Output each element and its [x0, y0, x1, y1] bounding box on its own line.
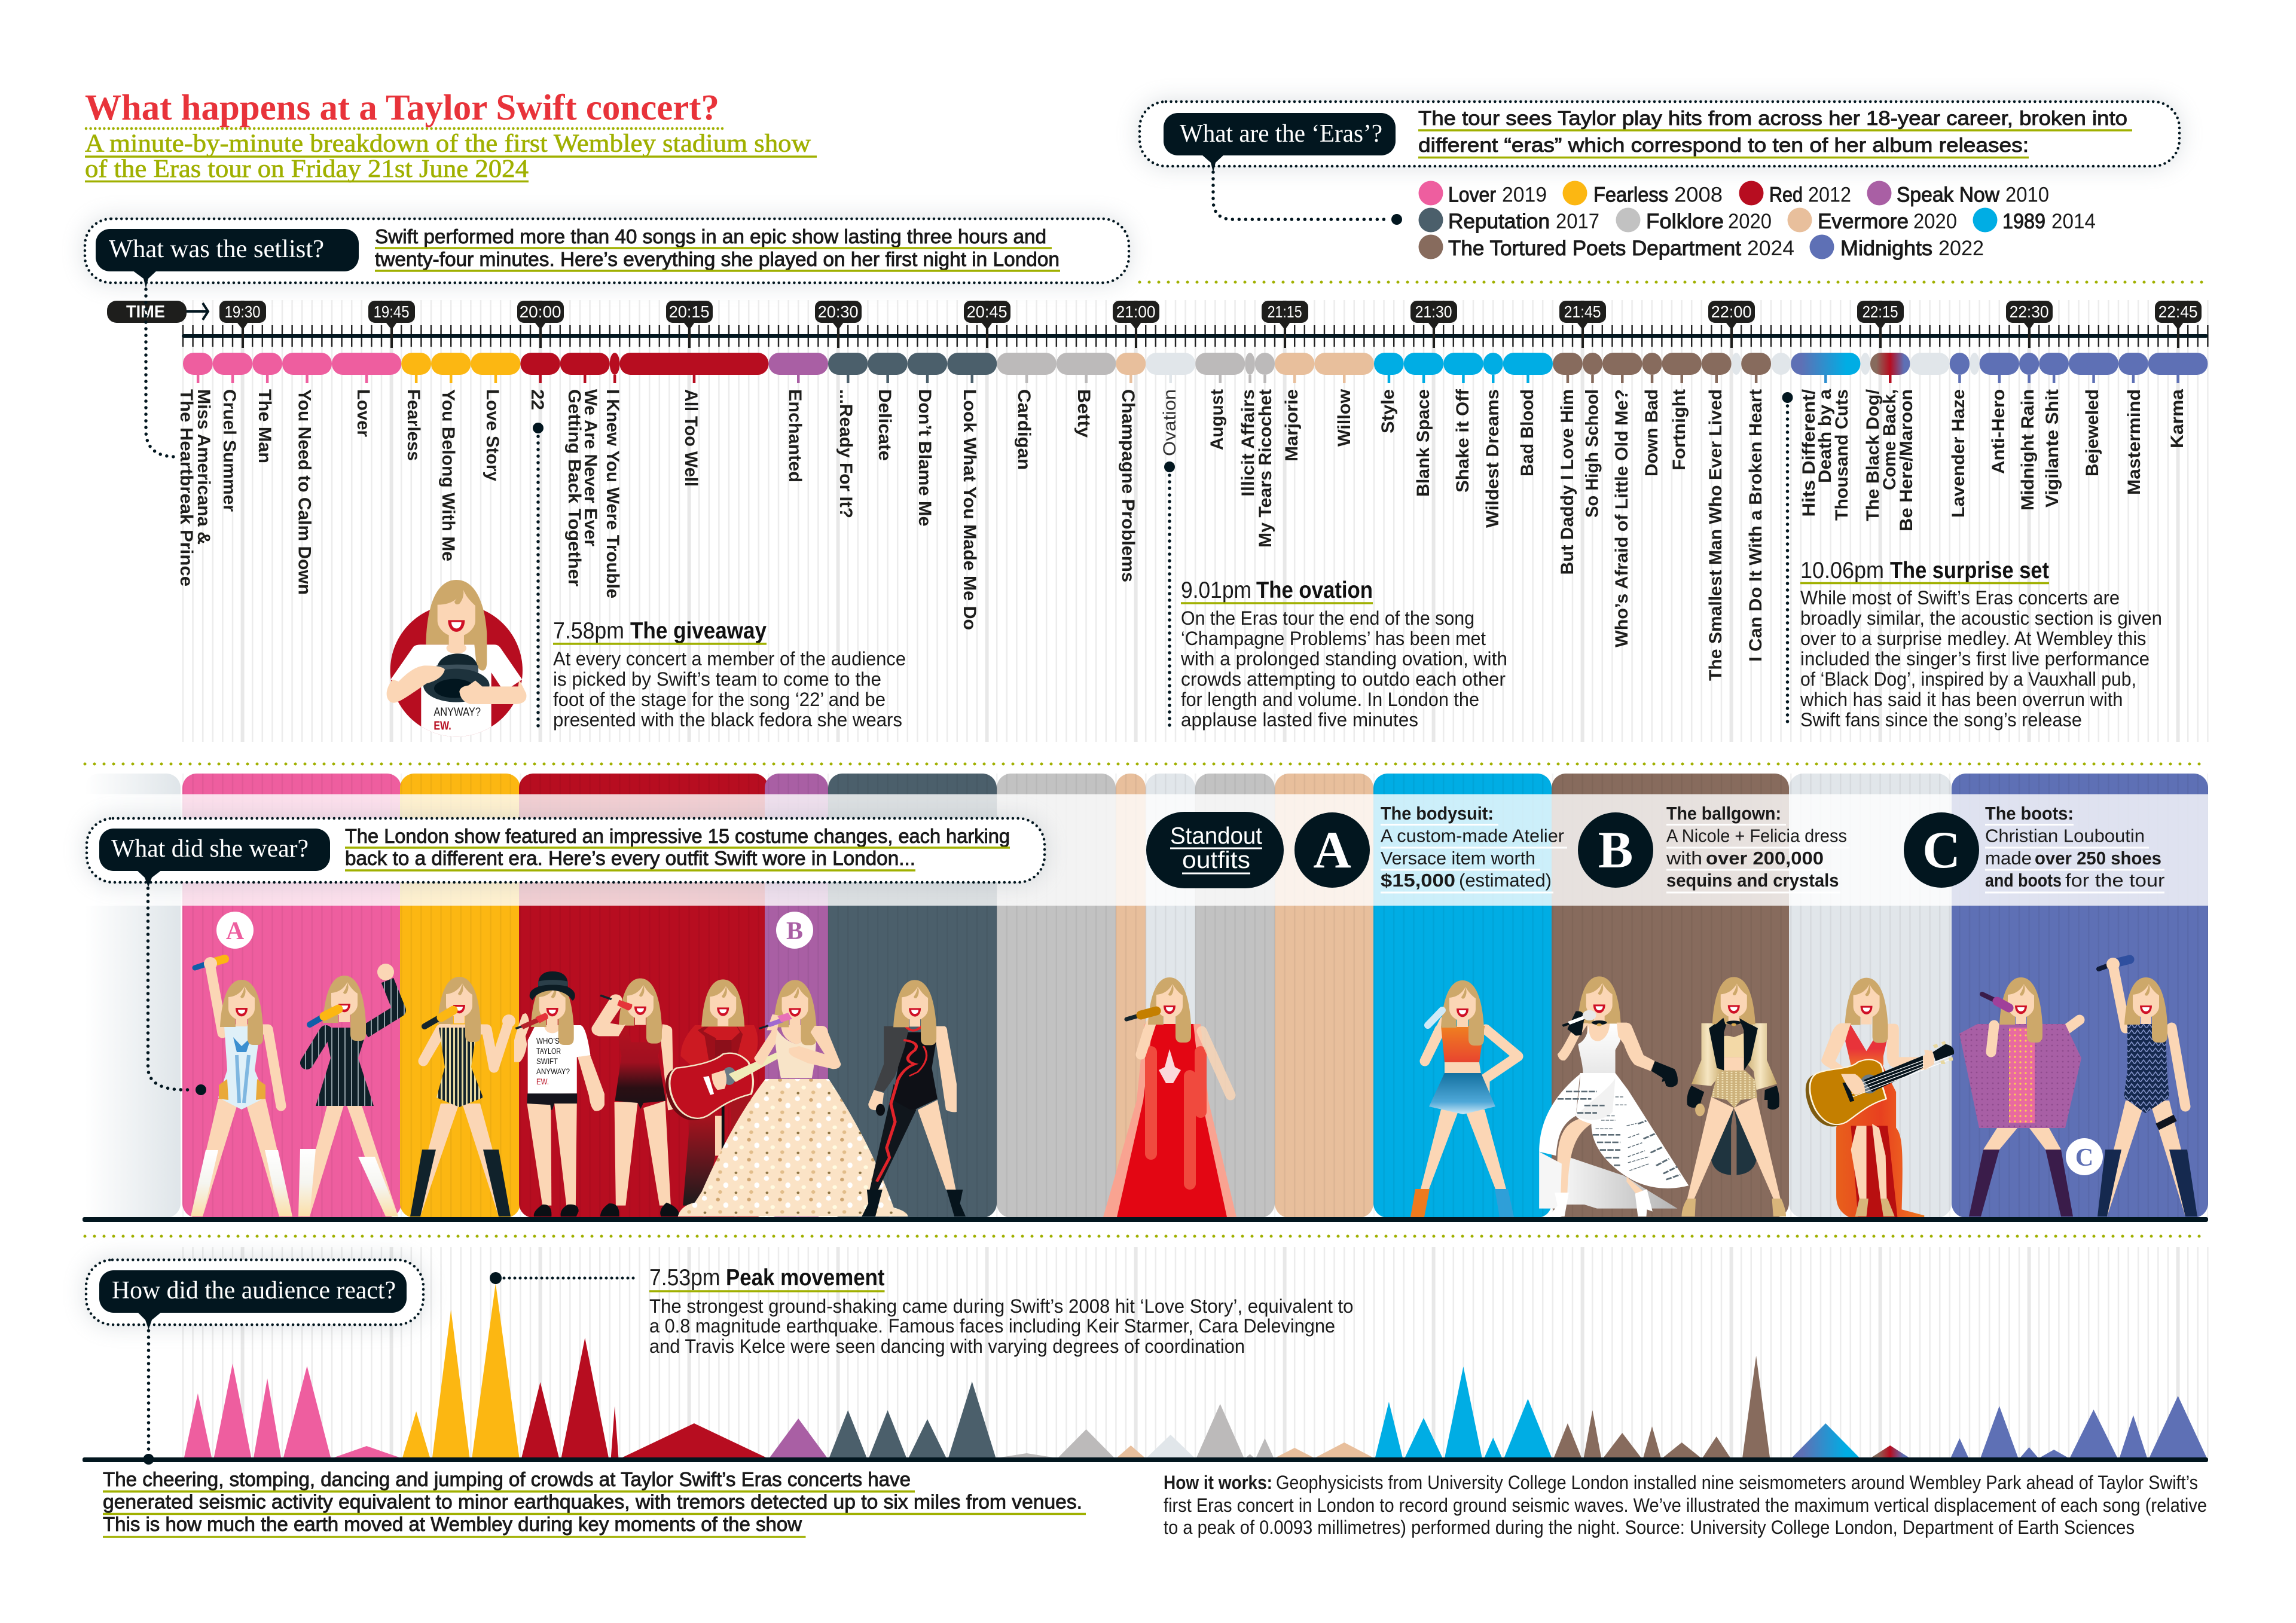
outfit C note: made	[1985, 848, 2032, 869]
outfit figure: Red T-shirt: EW.	[536, 1077, 549, 1086]
callout: the surprise set: which has said it has been overrun with	[1800, 689, 2123, 710]
grid lines: seismic	[182, 1247, 2210, 1457]
callout: peak movement: The strongest ground-shaking came during Swift’s 2008 hit ‘Love Story’, equivalent to	[649, 1295, 1354, 1317]
song titles: second half reading upward: So High School	[1582, 389, 1602, 518]
clock markers: 20:30	[818, 302, 859, 321]
song titles: first half reading downward: Lover	[353, 389, 373, 437]
callout: the giveaway: At every concert a member of the audience	[553, 648, 906, 670]
callout: the ovation: ‘Champagne Problems’ has been met	[1181, 628, 1486, 649]
callout: the ovation: The ovation	[1256, 577, 1373, 603]
outfit B note: sequins and crystals	[1666, 870, 1839, 891]
arrow: audience to seismic line	[144, 1331, 154, 1465]
song titles: first half reading downward: Look What You Made Me Do	[960, 389, 979, 630]
era colour columns	[85, 774, 2208, 1218]
legend: 2019	[1502, 183, 1547, 207]
song titles: second half reading upward: Death by a	[1815, 389, 1835, 483]
standout outfits badge: outfits	[1182, 847, 1250, 873]
outfit figure: Red bodysuit	[591, 979, 679, 1217]
legend: Speak Now	[1897, 183, 2000, 207]
seismic chart	[184, 1283, 2206, 1457]
question pill: audience: How did the audience react?	[112, 1277, 396, 1304]
question pill: eras: What are the ‘Eras’?	[1180, 120, 1382, 148]
outfit figure: Fearless	[410, 977, 515, 1217]
clock markers: 19:45	[374, 302, 410, 321]
song titles: first half reading downward: ...Ready For It?	[836, 389, 856, 518]
legend: 2022	[1938, 237, 1984, 260]
song titles: second half reading upward: Who’s Afraid of Little Old Me?	[1612, 389, 1632, 647]
outfit C note: for the tour	[2065, 870, 2164, 891]
clock markers: 22:00	[1711, 302, 1752, 321]
eras intro text	[1418, 107, 2132, 158]
outfit figure: Midnights bodysuit	[2097, 958, 2197, 1217]
legend: Red	[1769, 183, 1803, 207]
legend: 1989	[2002, 210, 2045, 233]
standout outfits badge: Standout	[1170, 823, 1262, 849]
song titles: second half reading upward: Fortnight	[1669, 389, 1689, 470]
outfit A note: $15,000	[1381, 870, 1455, 891]
song titles: first half reading downward: Enchanted	[785, 389, 805, 482]
arrow: wear to first outfit	[148, 888, 206, 1095]
outfit figure: Red T-shirt: TAYLOR	[536, 1046, 561, 1056]
seismic explanation text: This is how much the earth moved at Wembley during key moments of the show	[103, 1513, 802, 1535]
song titles: second half reading upward: But Daddy I Love Him	[1558, 389, 1577, 575]
song titles: second half reading upward: Down Bad	[1642, 389, 1662, 476]
song titles: second half reading upward: Blank Space	[1413, 389, 1433, 497]
callout: the surprise set: Swift fans since the song’s release	[1800, 709, 2082, 730]
how it works note: first Eras concert in London to record ground seismic waves. We’ve illustrated the maximum vertical displacement of each song (relative	[1164, 1494, 2207, 1516]
seismic explanation text: generated seismic activity equivalent to minor earthquakes, with tremors detected up to six miles from venues.	[103, 1491, 1082, 1512]
arrow: setlist to first song	[146, 289, 173, 457]
song titles: first half reading downward: I Knew You Were Trouble	[603, 389, 622, 598]
callout: peak movement: a 0.8 magnitude earthquake. Famous faces including Keir Starmer, Cara Delevingne	[649, 1315, 1335, 1337]
outfit figure: Red T-shirt: WHO’S	[536, 1036, 560, 1046]
outfit C note: C	[1922, 821, 1961, 879]
outfit C note: and boots	[1985, 870, 2062, 891]
wear intro text	[345, 825, 1010, 870]
callout: the ovation: crowds attempting to outdo each other	[1181, 668, 1506, 690]
outfit figure: TTPD gold jacket	[1681, 977, 1786, 1217]
how it works note: to a peak of 0.0093 millimetres) performed during the night. Source: University College London, Department of Earth Sciences	[1164, 1517, 2135, 1538]
legend: Folklore	[1646, 210, 1724, 233]
song titles: first half reading downward: You Need to Calm Down	[294, 389, 315, 595]
outfit figure: Evermore dress	[1103, 977, 1236, 1217]
song titles: second half reading upward: Illicit Affairs	[1238, 389, 1258, 497]
song titles: second half reading upward: The Smallest Man Who Ever Lived	[1706, 389, 1726, 681]
marker B: B	[786, 918, 803, 945]
callout: the giveaway: The giveaway	[630, 618, 767, 644]
legend: Evermore	[1818, 210, 1909, 233]
song titles: first half reading downward: Fearless	[404, 389, 423, 461]
callout: the ovation: 9.01pm	[1181, 577, 1251, 603]
song titles: second half reading upward: Style	[1378, 389, 1398, 433]
song titles: second half reading upward: The Black Dog/	[1863, 389, 1883, 521]
song titles: first half reading downward: The Heartbreak Prince	[176, 389, 196, 586]
setlist intro text: Swift performed more than 40 songs in an epic show lasting three hours and	[375, 225, 1046, 247]
song titles: second half reading upward: Karma	[2167, 389, 2187, 448]
eras intro text: different “eras” which correspond to ten of her album releases:	[1418, 134, 2029, 156]
callout: the ovation: applause lasted five minutes	[1181, 709, 1418, 730]
outfit figure: TTPD white dress	[1539, 976, 1689, 1217]
panel: what was the setlist	[85, 219, 1129, 288]
outfit C note: The boots:	[1985, 803, 2074, 824]
legend: The Tortured Poets Department	[1448, 237, 1741, 260]
outfit B note: A Nicole + Felicia dress	[1666, 825, 1847, 846]
question pill: wear	[99, 829, 330, 887]
legend: 2020	[1913, 210, 1957, 233]
callout: the surprise set: broadly similar, the acoustic section is given	[1800, 607, 2162, 629]
song titles: second half reading upward: Mastermind	[2124, 389, 2144, 495]
callout: the surprise set: included the singer’s first live performance	[1800, 648, 2150, 670]
outfit figure: Red T-shirt: SWIFT	[536, 1056, 558, 1066]
outfit A note: The bodysuit:	[1381, 803, 1494, 824]
song titles: first half reading downward: All Too Well	[681, 389, 701, 487]
song titles: second half reading upward: Ovation	[1160, 389, 1180, 456]
song titles: first half reading downward: We Are Never Ever	[581, 389, 600, 546]
legend: 2008	[1674, 183, 1723, 207]
question pill: audience	[99, 1270, 407, 1329]
callout: the giveaway	[533, 423, 906, 730]
seismic explanation text	[103, 1468, 1086, 1537]
callout: the giveaway: foot of the stage for the song ‘22’ and be	[553, 689, 886, 710]
song titles: first half reading downward: Getting Back Together	[564, 389, 584, 586]
song titles: first half reading downward: You Belong With Me	[438, 389, 458, 561]
outfit A note	[1294, 803, 1567, 893]
question pill: setlist	[96, 229, 359, 288]
callout: peak movement: and Travis Kelce were seen dancing with varying degrees of coordination	[649, 1335, 1245, 1357]
callout: the ovation: for length and volume. In London the	[1181, 689, 1479, 710]
song titles: second half reading upward: Vigilante Shit	[2042, 389, 2062, 508]
song titles: first half reading downward: 22	[527, 389, 547, 410]
outfit figure: Speak Now ballgown	[678, 980, 908, 1217]
callout: peak movement: 7.53pm	[649, 1265, 720, 1291]
outfit figure: Reputation	[862, 980, 966, 1217]
callout: the surprise set: over to a surprise medley. At Wembley this	[1800, 628, 2147, 649]
clock markers: 20:45	[967, 302, 1007, 321]
callout: the giveaway: presented with the black fedora she wears	[553, 709, 902, 730]
arrow: eras to legend	[1213, 172, 1402, 225]
song titles: second half reading upward: Willow	[1335, 389, 1354, 447]
clock markers: 20:00	[520, 302, 561, 321]
callout: the giveaway: 7.58pm	[553, 618, 624, 644]
subtitle: of the Eras tour on Friday 21st June 2024	[85, 155, 529, 183]
song duration pills	[183, 353, 2208, 383]
illustration: Swift holding the fedora	[387, 580, 526, 739]
setlist intro text	[375, 225, 1060, 271]
song titles: second half reading upward: Hits Different/	[1799, 389, 1819, 516]
song titles: second half reading upward: I Can Do It With a Broken Heart	[1746, 389, 1766, 662]
song titles: second half reading upward: Come Back,	[1880, 389, 1900, 490]
song titles: second half reading upward: Be Here/Maroon	[1897, 389, 1916, 531]
outfit A note: A	[1313, 821, 1351, 879]
outfit C note: over 250 shoes	[2035, 848, 2161, 869]
legend: Fearless	[1593, 183, 1668, 207]
eras intro text: The tour sees Taylor play hits from across her 18-year career, broken into	[1418, 107, 2127, 129]
song titles: second half reading upward: Bad Blood	[1518, 389, 1537, 476]
legend: 2014	[2051, 210, 2096, 233]
clock markers: 19:30	[225, 302, 261, 321]
clock markers	[219, 301, 2202, 348]
song titles: second half reading upward: Anti-Hero	[1989, 389, 2008, 474]
grid lines: setlist	[182, 300, 2210, 742]
outfit B note: with	[1666, 848, 1702, 869]
marker C: C	[2075, 1144, 2093, 1172]
callout: the surprise set: The surprise set	[1890, 558, 2049, 583]
panel: how did the audience react	[86, 1260, 423, 1329]
legend: 2010	[2005, 183, 2049, 207]
legend: Reputation	[1448, 210, 1550, 233]
song titles: second half reading upward: Marjorie	[1282, 389, 1302, 461]
clock markers: 22:15	[1863, 302, 1898, 321]
song titles: second half reading upward: Midnight Rain	[2018, 389, 2038, 511]
seismic baseline	[83, 1457, 2208, 1462]
outfit figure: 1989	[1410, 980, 1518, 1217]
time label	[107, 301, 208, 323]
legend: Lover	[1448, 183, 1496, 207]
clock markers: 22:45	[2158, 302, 2198, 321]
standout outfits badge	[1146, 812, 1284, 888]
question pill: setlist: What was the setlist?	[109, 236, 324, 263]
clock markers: 20:15	[669, 302, 710, 321]
setlist intro text: twenty-four minutes. Here’s everything she played on her first night in London	[375, 248, 1060, 270]
outfit A note: Versace item worth	[1381, 848, 1535, 869]
callout: peak movement: Peak movement	[726, 1265, 885, 1291]
song titles: first half reading downward: Cardigan	[1014, 389, 1034, 470]
song titles: first half reading downward: Love Story	[483, 389, 502, 481]
legend	[1418, 181, 2096, 260]
song titles: first half reading downward: Betty	[1074, 389, 1094, 438]
outfit figure: Lover bodysuit	[191, 957, 292, 1217]
outfit A note: A custom-made Atelier	[1381, 825, 1564, 846]
question pill: eras	[1164, 113, 1396, 172]
question pill: wear: What did she wear?	[111, 835, 309, 863]
callout: the ovation: with a prolonged standing ovation, with	[1180, 648, 1507, 670]
marker A: A	[226, 918, 245, 945]
translucent band	[85, 794, 2208, 906]
clock markers: 21:15	[1268, 302, 1302, 321]
clock markers: 22:30	[2010, 302, 2049, 321]
wear intro text: The London show featured an impressive 15 costume changes, each harking	[345, 825, 1010, 847]
clock markers: 21:45	[1564, 302, 1601, 321]
time axis	[107, 301, 2209, 348]
legend: 2012	[1808, 183, 1851, 207]
panel: what are the eras	[1140, 102, 2179, 172]
outfit B note	[1578, 803, 1849, 893]
illustration: Swift holding the fedora: ANYWAY?	[433, 705, 481, 719]
clock markers: 21:30	[1415, 302, 1452, 321]
song titles: first half reading downward: Don’t Blame Me	[915, 389, 935, 526]
callout: the surprise set: While most of Swift’s Eras concerts are	[1800, 587, 2120, 609]
wear intro text: back to a different era. Here’s every outfit Swift wore in London...	[345, 847, 915, 869]
callout: the surprise set	[1782, 392, 2162, 730]
song titles: second half reading upward: Wildest Dreams	[1483, 389, 1503, 528]
outfit A note: (estimated)	[1459, 870, 1552, 891]
legend: 2024	[1747, 237, 1794, 260]
outfit figure: Red T-shirt	[514, 971, 604, 1217]
song titles: first half reading downward: Champagne Problems	[1118, 389, 1138, 582]
clock markers: 21:00	[1116, 302, 1156, 321]
time label: TIME	[126, 302, 165, 322]
outfit B note: B	[1598, 821, 1633, 879]
song titles: second half reading upward	[1160, 389, 2187, 681]
how it works note: Geophysicists from University College London installed nine seismometers around Wembley Park ahead of Taylor Swift’s	[1276, 1472, 2198, 1493]
legend: 2017	[1556, 210, 1599, 233]
seismic explanation text: The cheering, stomping, dancing and jumping of crowds at Taylor Swift’s Eras concerts have	[103, 1468, 911, 1490]
panel: what did she wear	[87, 818, 1045, 887]
how it works note	[1164, 1472, 2207, 1538]
song titles: first half reading downward: Delicate	[875, 389, 894, 461]
costume baseline	[83, 1217, 2208, 1222]
callout: the surprise set: of ‘Black Dog’, inspired by a Vauxhall pub,	[1800, 668, 2136, 690]
marker C	[2066, 1138, 2103, 1175]
title: What happens at a Taylor Swift concert?	[85, 88, 719, 128]
subtitle	[85, 130, 817, 183]
legend: Midnights	[1840, 237, 1932, 260]
song titles: first half reading downward: The Man	[255, 389, 274, 463]
callout: the surprise set: 10.06pm	[1800, 558, 1884, 583]
callout: peak movement	[490, 1265, 1354, 1357]
outfit figure: Midnights coat	[1959, 977, 2081, 1217]
subtitle: A minute-by-minute breakdown of the first Wembley stadium show	[85, 130, 811, 158]
song titles: second half reading upward: Bejeweled	[2083, 389, 2102, 476]
song titles: first half reading downward: Cruel Summer	[219, 389, 239, 512]
outfit B note: over 200,000	[1706, 848, 1824, 869]
outfit B note: The ballgown:	[1666, 803, 1781, 824]
callout: the giveaway: is picked by Swift’s team to come to the	[553, 668, 881, 690]
marker A	[216, 912, 254, 949]
illustration: Swift holding the fedora: EW.	[433, 719, 451, 733]
outfit figure: surprise set guitar	[1806, 978, 1954, 1218]
song titles: second half reading upward: Lavender Haze	[1949, 389, 1968, 518]
song titles: second half reading upward: Shake it Off	[1453, 389, 1473, 493]
outfit figure: Red guitar	[665, 979, 781, 1206]
song titles: second half reading upward: August	[1207, 389, 1227, 450]
song titles: second half reading upward: My Tears Ricochet	[1256, 389, 1275, 548]
song titles: first half reading downward: Miss Americana &	[194, 389, 213, 545]
outfit C note	[1904, 803, 2164, 893]
song titles: first half reading downward	[176, 389, 1138, 630]
legend: 2020	[1728, 210, 1772, 233]
outfit figure: Red T-shirt: ANYWAY?	[536, 1066, 570, 1076]
how it works note: How it works:	[1164, 1472, 1272, 1493]
song titles: second half reading upward: Thousand Cuts	[1832, 389, 1852, 521]
marker B	[776, 912, 813, 949]
outfit C note: Christian Louboutin	[1985, 825, 2145, 846]
outfit figure: Lover blazer	[298, 964, 399, 1217]
callout: the ovation: On the Eras tour the end of the song	[1181, 607, 1474, 629]
callout: the ovation	[1164, 461, 1507, 730]
